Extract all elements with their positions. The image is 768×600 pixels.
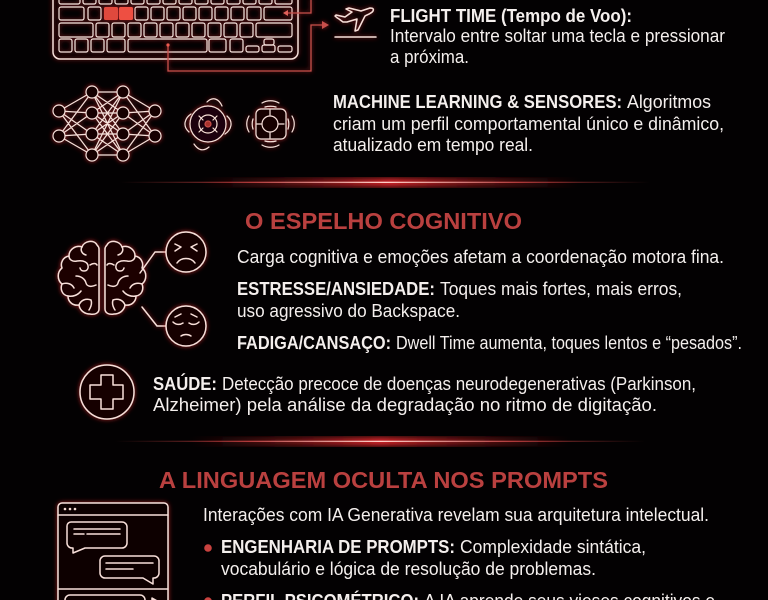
icon: stressed face [166, 232, 206, 272]
bullet: engenharia de prompts [204, 536, 646, 579]
divider [115, 437, 645, 446]
text: saude: Alzheimer) pela análise da degradação no ritmo de digitação. [153, 394, 657, 415]
text: cognitive mirror body: Carga cognitiva e emoções afetam a coordenação motora fina. [237, 246, 724, 267]
bullet: engenharia de prompts: Complexidade sintática, [460, 536, 646, 557]
icon: brain [58, 241, 166, 326]
text: cognitive mirror body: Toques mais fortes, mais erros, [440, 278, 682, 299]
heading: a linguagem oculta nos prompts: A LINGUAGEM OCULTA NOS PROMPTS [159, 467, 608, 493]
text: flight time: a próxima. [390, 46, 469, 67]
text: machine learning: MACHINE LEARNING & SENSORES: [333, 92, 622, 112]
icon: tired face [166, 306, 206, 346]
chat bubble reply [100, 556, 159, 584]
highlighted keys [104, 7, 133, 20]
bullet: engenharia de prompts: ENGENHARIA DE PROMPTS: [221, 537, 455, 557]
divider [120, 178, 650, 187]
text: saude [153, 373, 696, 415]
text: flight time: FLIGHT TIME (Tempo de Voo): [390, 6, 632, 26]
bullet: engenharia de prompts: vocabulário e lógica de resolução de problemas. [221, 558, 596, 579]
text: machine learning [333, 91, 724, 155]
text: saude: SAÚDE: [153, 373, 217, 394]
text: saude: Detecção precoce de doenças neurodegenerativas (Parkinson, [222, 373, 696, 394]
icon: medical cross [80, 365, 134, 419]
connector lines [166, 0, 329, 71]
icon: gyroscope sensor [185, 99, 231, 150]
text: cognitive mirror body: ESTRESSE/ANSIEDADE: [237, 279, 435, 299]
bullet: perfil psicometrico [204, 590, 715, 600]
connector lines [140, 252, 166, 326]
text: flight time [390, 6, 725, 67]
text: prompts intro: Interações com IA Generativa revelam sua arquitetura intelectual. [203, 504, 709, 525]
icon: airplane take-off [335, 8, 376, 37]
text: machine learning: Algoritmos [627, 91, 711, 112]
text: machine learning: atualizado em tempo real. [333, 134, 533, 155]
text: cognitive mirror body: uso agressivo do Backspace. [237, 300, 460, 321]
text: flight time: Intervalo entre soltar uma tecla e pressionar [390, 25, 725, 46]
icon: keyboard with connector lines [53, 0, 329, 71]
chat bubble [67, 522, 127, 553]
text: cognitive mirror body [237, 246, 742, 353]
icon: neural network [53, 86, 161, 161]
icon: chat window [58, 503, 168, 600]
heading: o espelho cognitivo: O ESPELHO COGNITIVO [245, 208, 522, 234]
text: machine learning: criam um perfil comportamental único e dinâmico, [333, 113, 724, 134]
text: cognitive mirror body: FADIGA/CANSAÇO: [237, 333, 391, 353]
prompt input [65, 595, 145, 600]
icon: motion sensor [247, 101, 294, 147]
